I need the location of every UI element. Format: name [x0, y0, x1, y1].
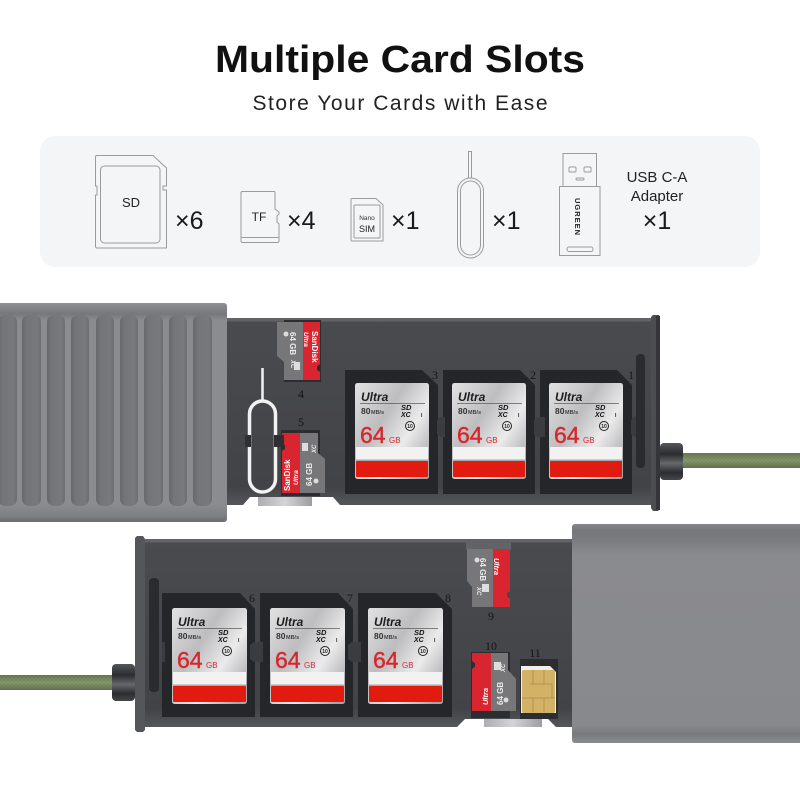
micro SD card 10: XC: [501, 663, 507, 673]
SD card slot 3: GB: [389, 436, 401, 445]
icon: Nano SIM: [351, 198, 383, 241]
subtitle: Store Your Cards with Ease: [252, 92, 548, 115]
micro SD card 5: SanDisk: [283, 459, 292, 491]
slot number 5: 5: [298, 415, 304, 429]
micro SD card 10: [472, 653, 516, 711]
SD card slot 8: SD: [414, 628, 425, 637]
title: Multiple Card Slots: [215, 39, 585, 81]
SD card slot 2: 80: [458, 406, 468, 416]
slot numbers 3 2 1: 2: [530, 368, 536, 382]
SD card slot 6: GB: [206, 661, 218, 670]
SD card slot 7: SD: [316, 628, 327, 637]
slot: micro card 4 bay: [284, 320, 321, 382]
SD card slot 8: 10: [420, 649, 426, 655]
SD card slot 1: Ultra: [555, 390, 583, 404]
SD card slot 7: MB/s: [286, 635, 299, 641]
count: Nano SIM: ×1: [391, 207, 420, 235]
micro SD card 4: [277, 322, 320, 380]
SD card slot 2: [443, 370, 535, 494]
card slit: [636, 354, 645, 468]
slot number 4: 4: [298, 387, 304, 401]
SD card slot 3: 64: [360, 422, 386, 448]
top cover with ribs: [0, 303, 227, 522]
micro SD card 9: 64 GB: [478, 558, 487, 581]
icon: TF card: TF: [252, 210, 266, 224]
slot: micro card 5 bay: [281, 430, 320, 496]
micro SD card 4: XC: [289, 359, 295, 369]
slot numbers 3 2 1: 1: [628, 368, 634, 382]
SD card slot 8: GB: [402, 661, 414, 670]
panel: top tray: [227, 315, 660, 511]
SD card slot 6: I: [238, 638, 240, 644]
top cable connector: [660, 443, 683, 480]
slot divider pegs: [437, 417, 636, 437]
bottom cable connector: [112, 664, 135, 701]
SD card slot 7: I: [336, 638, 338, 644]
panel: included items: [40, 136, 760, 267]
micro SD card 4: 64 GB: [288, 332, 297, 355]
icon: SD card: [96, 156, 166, 248]
slot divider pegs: [162, 642, 361, 662]
slot numbers 6 7 8: [249, 591, 451, 605]
top cable: [683, 453, 800, 468]
slot: micro card 9 bay: [466, 541, 511, 550]
nano SIM card: [521, 666, 556, 713]
SD card slot 2: 10: [504, 424, 510, 430]
slot number 9: 9: [488, 609, 494, 623]
SD card slot 3: 10: [407, 424, 413, 430]
icon: USB adapter: UGREEN: [573, 198, 582, 235]
SD card slot 1: I: [615, 413, 617, 419]
SD card slot 7: XC: [315, 637, 327, 644]
count: adapter: ×1: [643, 207, 671, 235]
SD card slot 7: 80: [276, 631, 286, 641]
icon: SD card: SD: [122, 195, 140, 210]
micro SD card 4: Ultra: [302, 332, 309, 347]
silver ejector: [258, 497, 312, 506]
micro SD card 9: Ultra: [492, 558, 501, 575]
SD card slot 7: Ultra: [276, 615, 304, 629]
label: USB C-A Adapter: USB C-A: [627, 169, 687, 186]
SD card slot 3: I: [421, 413, 423, 419]
SD card slot 1: GB: [583, 436, 595, 445]
count: SIM pin: ×1: [492, 207, 521, 235]
icon: SIM pin: [458, 152, 484, 258]
slot number 11: 11: [529, 646, 541, 660]
count: SD: ×6: [175, 207, 204, 235]
icon: Nano SIM: SIM: [359, 224, 375, 234]
bottom cover: [572, 524, 800, 743]
micro SD card 10: Ultra: [481, 688, 490, 705]
SD card slot 3: XC: [400, 412, 412, 419]
SIM ejector pin: [250, 368, 276, 492]
slot number 10: 10: [485, 639, 497, 653]
SD card slot 1: MB/s: [565, 410, 578, 416]
SD card slot 7: GB: [304, 661, 316, 670]
SD card slot 2: GB: [486, 436, 498, 445]
slot numbers 3 2 1: 3: [432, 368, 438, 382]
SD card slot 3: Ultra: [361, 390, 389, 404]
SD card slot 6: Ultra: [178, 615, 206, 629]
slot numbers 6 7 8: 7: [347, 591, 353, 605]
slot numbers 6 7 8: 6: [249, 591, 255, 605]
slot: nano SIM bay: [520, 659, 558, 719]
SD card slot 2: XC: [497, 412, 509, 419]
panel: bottom tray: [135, 536, 575, 732]
SD card slot 1: 10: [601, 424, 607, 430]
SD card slot 6: 64: [177, 647, 203, 673]
SD card slot 3: SD: [401, 403, 412, 412]
icon: TF card: [241, 192, 279, 242]
SD card slot 7: 10: [322, 649, 328, 655]
micro SD card 9: XC: [475, 586, 481, 596]
SD card slot 8: [358, 593, 452, 717]
SD card slot 1: 80: [555, 406, 565, 416]
micro SD card 5: 64 GB: [305, 463, 314, 486]
bottom cable: [0, 675, 112, 690]
micro SD card 10: 64 GB: [496, 682, 505, 705]
SD card slot 3: [345, 370, 438, 494]
slot numbers 3 2 1: [432, 368, 634, 382]
SD card slot 2: MB/s: [468, 410, 481, 416]
label: USB C-A Adapter: Adapter: [631, 188, 683, 205]
slot numbers 6 7 8: 8: [445, 591, 451, 605]
SD card slot 6: [162, 593, 255, 717]
SD card slot 7: 64: [275, 647, 301, 673]
SD card slot 2: 64: [457, 422, 483, 448]
SD card slot 8: 80: [374, 631, 384, 641]
micro SD card 5: [282, 433, 325, 493]
SD card slot 8: Ultra: [374, 615, 402, 629]
SD card slot 6: XC: [217, 637, 229, 644]
SD card slot 8: MB/s: [384, 635, 397, 641]
micro SD card 4: SanDisk: [310, 331, 319, 363]
SD card slot 1: XC: [594, 412, 606, 419]
SD card slot 8: XC: [413, 637, 425, 644]
pin clips: [245, 435, 284, 447]
SD card slot 1: [540, 370, 632, 494]
icon: USB adapter: [560, 154, 600, 256]
SD card slot 6: 80: [178, 631, 188, 641]
SD card slot 6: 10: [224, 649, 230, 655]
micro SD card 5: XC: [312, 444, 318, 454]
SD card slot 3: 80: [361, 406, 371, 416]
SD card slot 2: SD: [498, 403, 509, 412]
SD card slot 7: [260, 593, 353, 717]
icon: Nano SIM: Nano: [359, 215, 375, 222]
SD card slot 8: 64: [373, 647, 399, 673]
micro SD card 5: Ultra: [293, 470, 300, 485]
label: USB C-A Adapter: [627, 169, 687, 205]
SD card slot 6: MB/s: [188, 635, 201, 641]
SD card slot 3: MB/s: [371, 410, 384, 416]
SD card slot 8: I: [434, 638, 436, 644]
micro SD card 9: [467, 549, 510, 607]
SD card slot 2: Ultra: [458, 390, 486, 404]
SD card slot 2: I: [518, 413, 520, 419]
silver ejector: [484, 719, 542, 727]
count: TF: ×4: [287, 207, 316, 235]
card slit: [149, 578, 159, 692]
SD card slot 1: SD: [595, 403, 606, 412]
SD card slot 1: 64: [554, 422, 580, 448]
slot: micro card 10 bay: [471, 652, 510, 718]
SD card slot 6: SD: [218, 628, 229, 637]
